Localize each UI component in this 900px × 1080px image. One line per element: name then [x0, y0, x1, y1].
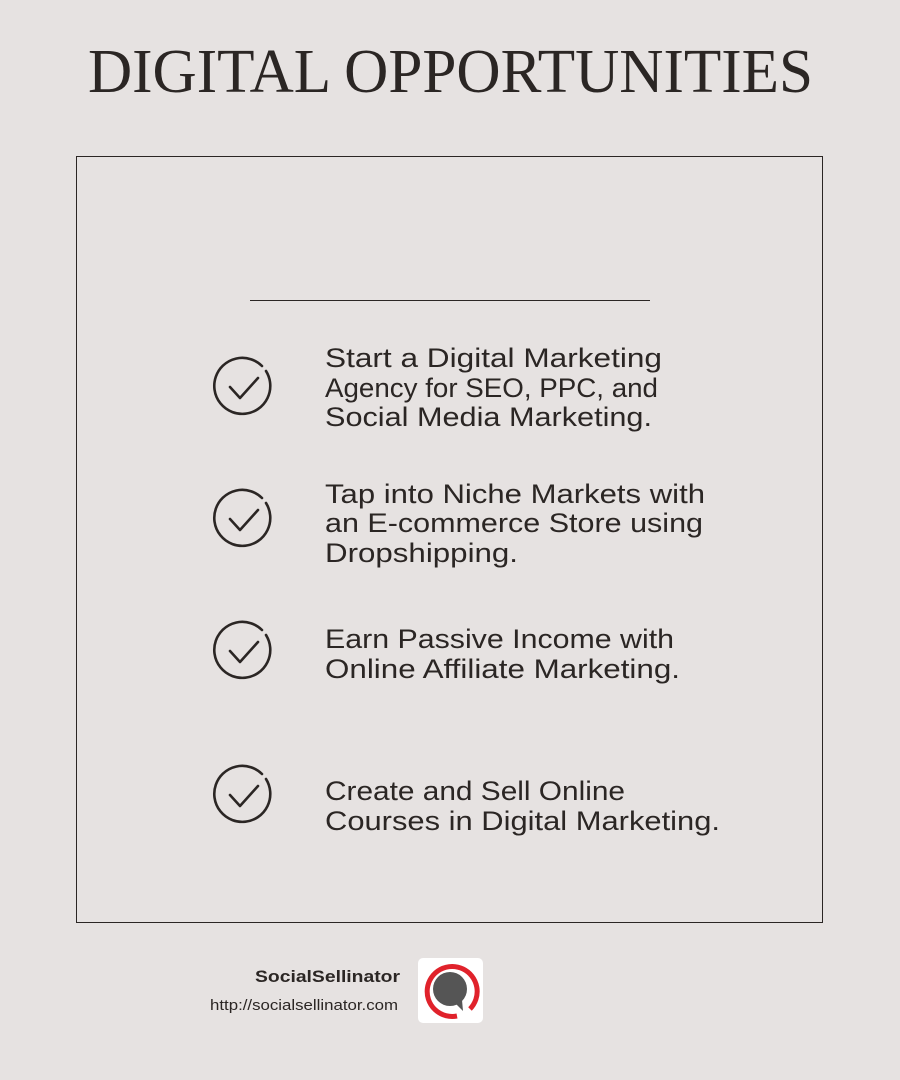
text 3: Online Affiliate Marketing.	[325, 654, 680, 684]
text 2: an E-commerce Store using	[325, 508, 703, 538]
title: DIGITAL OPPORTUNITIES	[88, 38, 813, 106]
text 1: Agency for SEO, PPC, and	[325, 373, 658, 403]
text 4: Create and Sell Online	[325, 776, 625, 806]
footer brand: SocialSellinator	[255, 967, 400, 986]
text 3: Earn Passive Income with	[325, 624, 674, 654]
text 1	[325, 343, 662, 432]
panel: opportunities box	[76, 156, 822, 922]
text 2	[325, 479, 705, 568]
icon: check circle 4	[214, 766, 270, 822]
icon: check circle 2	[214, 490, 270, 546]
text 2: Tap into Niche Markets with	[325, 479, 705, 509]
text 4	[325, 776, 720, 836]
text 2: Dropshipping.	[325, 538, 518, 568]
text 1: Social Media Marketing.	[325, 402, 652, 432]
icon: logo	[418, 958, 483, 1023]
icon: check circle 1	[214, 358, 270, 414]
item 2	[214, 479, 705, 568]
footer brand	[210, 967, 400, 1014]
text 4: Courses in Digital Marketing.	[325, 806, 720, 836]
footer brand: http://socialsellinator.com	[210, 997, 398, 1014]
text 1: Start a Digital Marketing	[325, 343, 662, 373]
text 3	[325, 624, 680, 684]
icon: check circle 3	[214, 622, 270, 678]
item 3	[214, 622, 680, 684]
item 4	[214, 766, 720, 836]
item 1	[214, 343, 662, 432]
